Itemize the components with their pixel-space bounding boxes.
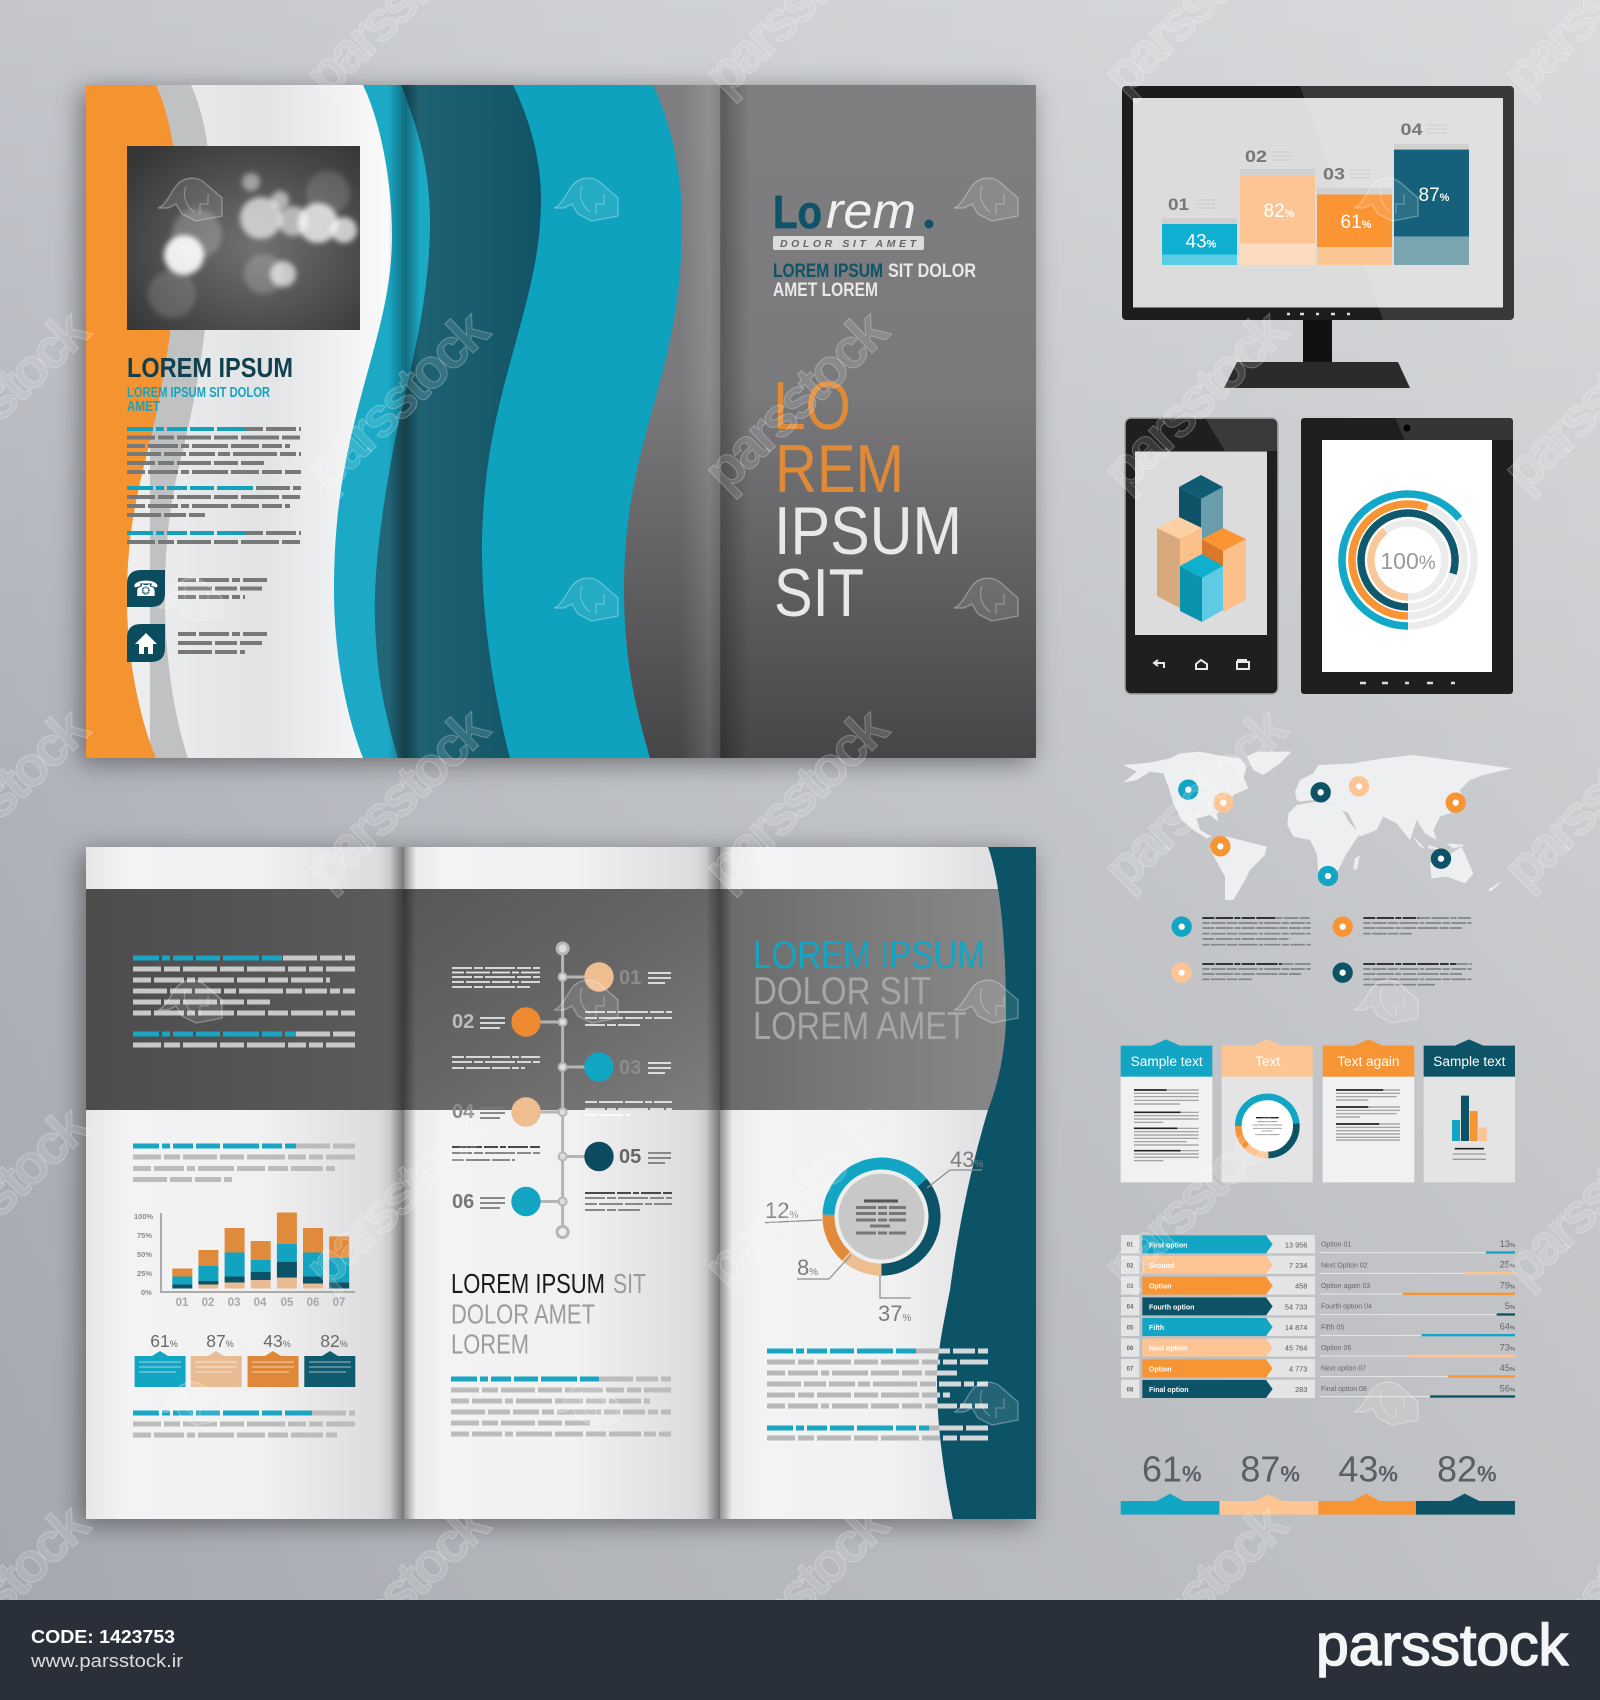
bar chart: 07	[333, 1297, 345, 1309]
option progress lines: 56%	[1500, 1383, 1515, 1393]
watermark: parsstock	[1090, 695, 1300, 901]
bar 02	[1240, 147, 1315, 265]
bar chart: 03	[228, 1297, 240, 1309]
timeline: 04	[452, 1101, 475, 1123]
bar chart: 04	[254, 1297, 267, 1309]
option progress lines: Next option 07	[1321, 1366, 1366, 1373]
text block above chart	[133, 1146, 355, 1180]
grey curved strip	[150, 85, 212, 758]
icon: home	[127, 624, 165, 662]
table indices: 07	[1127, 1367, 1134, 1373]
bar 03	[1317, 164, 1392, 265]
bottom percent stats: 82%	[1437, 1449, 1497, 1490]
bar 01: 01	[1168, 195, 1189, 214]
card: text with donut: Text	[1255, 1054, 1280, 1069]
table arrows	[1142, 1235, 1273, 1398]
card: sample text with bars: Sample text	[1433, 1054, 1506, 1069]
percent boxes: 82%	[320, 1331, 348, 1351]
bar 02: 02	[1245, 147, 1267, 166]
donut chart: 12%	[765, 1198, 798, 1223]
option progress lines: 25%	[1500, 1260, 1515, 1270]
table labels: Fifth	[1149, 1325, 1164, 1332]
cover big title: SIT	[774, 555, 864, 631]
radial chart	[1342, 494, 1474, 626]
table indices: 05	[1127, 1325, 1134, 1331]
table labels: First option	[1149, 1242, 1187, 1249]
cover big title: REM	[775, 431, 904, 507]
cards	[1121, 1039, 1515, 1182]
right column text lines	[767, 1351, 988, 1438]
teal wave	[352, 85, 541, 758]
timeline: 03	[619, 1057, 641, 1079]
table values: 14 874	[1285, 1323, 1307, 1332]
logo: parsstock	[1316, 1613, 1569, 1678]
bar chart	[134, 1212, 355, 1309]
option progress lines: 45%	[1500, 1363, 1515, 1373]
cover big title: LO	[773, 368, 851, 444]
watermark: parsstock	[1090, 1491, 1300, 1697]
icon: phone buttons	[1154, 660, 1249, 669]
table labels: Second	[1149, 1263, 1174, 1270]
option progress lines: Option again 03	[1321, 1283, 1370, 1290]
watermark: parsstock	[292, 695, 502, 901]
table indices: 03	[1127, 1284, 1134, 1290]
table values: 13 956	[1285, 1240, 1307, 1249]
percent boxes	[135, 1331, 355, 1387]
table values: 7 234	[1289, 1261, 1307, 1270]
cover big title	[773, 368, 962, 631]
heading: right column: LOREM AMET	[753, 1005, 967, 1048]
table values: 45 764	[1285, 1344, 1307, 1353]
light blue wave	[334, 85, 430, 758]
table indices: 04	[1127, 1305, 1134, 1311]
table labels: Option	[1149, 1366, 1171, 1373]
cover page	[400, 85, 1036, 758]
watermark: parsstock	[691, 695, 901, 901]
bar 02: 82%	[1264, 201, 1295, 222]
bar chart: 75%	[137, 1231, 152, 1240]
icon: cubes	[1157, 475, 1246, 622]
bar chart: 02	[202, 1297, 214, 1309]
bar 04: 87%	[1419, 185, 1450, 206]
cover subtitle: LOREM IPSUM	[773, 261, 883, 282]
cover subtitle: SIT DOLOR	[888, 261, 976, 282]
middle column text lines	[451, 1379, 671, 1434]
watermark: parsstock	[292, 1491, 502, 1697]
timeline: 06	[452, 1191, 474, 1213]
table values: 4 773	[1289, 1364, 1307, 1373]
bar chart: 05	[281, 1297, 294, 1309]
heading: right column: DOLOR SIT	[753, 970, 931, 1013]
body text lines	[127, 429, 301, 542]
bottom percent stats: 61%	[1142, 1449, 1202, 1490]
table indices	[1127, 1243, 1134, 1393]
cover big title: IPSUM	[774, 493, 962, 569]
option progress lines: 79%	[1500, 1280, 1515, 1290]
logo: DOLOR SIT AMET	[780, 238, 918, 250]
table labels: Next option	[1149, 1346, 1187, 1353]
donut chart: 37%	[878, 1301, 911, 1326]
heading: right column	[753, 934, 985, 1048]
logo: Lo	[773, 186, 822, 238]
timeline: 02	[452, 1011, 474, 1033]
bar 03: 03	[1323, 164, 1345, 184]
watermark: parsstock	[691, 1491, 901, 1697]
table labels: Fourth option	[1149, 1304, 1194, 1311]
footer	[0, 1600, 1600, 1700]
card: sample text with bars	[1424, 1039, 1515, 1182]
option table	[1121, 1235, 1515, 1398]
photo with bokeh	[127, 146, 360, 330]
table indices: 06	[1127, 1346, 1134, 1352]
icon: phone	[127, 570, 165, 607]
percent boxes: 61%	[150, 1331, 178, 1351]
world map with pins	[1123, 752, 1512, 985]
option progress lines: Fifth 05	[1321, 1324, 1344, 1331]
phone with isometric cubes	[1125, 418, 1278, 694]
donut chart	[765, 1147, 983, 1326]
radial chart: 100%	[1380, 548, 1436, 574]
panel: brochure cover spread	[86, 85, 1036, 758]
heading: lorem ipsum sit dolor amet lorem: LOREM IPSUM	[451, 1268, 605, 1299]
card: sample text	[1121, 1039, 1212, 1182]
table labels: Final option	[1149, 1387, 1189, 1394]
map pins	[1182, 780, 1462, 883]
bottom percent stats: 87%	[1240, 1449, 1300, 1490]
table indices: 01	[1127, 1243, 1134, 1249]
heading: lorem ipsum sit dolor amet lorem	[451, 1268, 646, 1360]
bar chart: 100%	[134, 1212, 154, 1221]
watermark: parsstock	[292, 1093, 502, 1299]
fold shading	[390, 847, 732, 1519]
table labels	[1149, 1242, 1194, 1394]
monitor with step chart	[1122, 86, 1514, 388]
bar 04: 04	[1400, 120, 1423, 139]
option progress lines: Fourth option 04	[1321, 1304, 1372, 1311]
subheading: LOREM IPSUM SIT DOLOR	[127, 385, 270, 401]
table values	[1285, 1240, 1307, 1394]
timeline: 01	[619, 967, 641, 989]
bar 01	[1162, 195, 1237, 265]
heading: lorem ipsum sit dolor amet lorem: LOREM	[451, 1328, 529, 1360]
table rows	[1121, 1235, 1315, 1398]
card: text again: Text again	[1337, 1054, 1399, 1069]
bar chart: 0%	[141, 1288, 152, 1297]
cover subtitle: AMET LOREM	[773, 280, 878, 301]
bar chart: 25%	[137, 1269, 152, 1278]
table labels: Option	[1149, 1284, 1171, 1291]
option progress lines: 13%	[1500, 1239, 1515, 1249]
card: sample text: Sample text	[1131, 1054, 1203, 1069]
bar 01: 43%	[1186, 232, 1217, 252]
blue wave	[400, 85, 682, 758]
timeline	[452, 943, 672, 1238]
subheading	[127, 385, 270, 415]
table values: 283	[1295, 1385, 1307, 1394]
contact text lines	[178, 580, 267, 652]
table values: 458	[1295, 1282, 1307, 1291]
donut chart: 8%	[797, 1255, 818, 1280]
teal side shape	[937, 847, 1036, 1519]
table indices: 08	[1127, 1387, 1134, 1393]
option progress lines: Option 06	[1321, 1345, 1351, 1352]
grey band	[86, 889, 1036, 1110]
code: CODE: 1423753	[31, 1627, 175, 1647]
bar chart: 50%	[137, 1250, 152, 1259]
option progress lines: 5%	[1505, 1301, 1515, 1311]
map legend	[1175, 918, 1472, 985]
fold shading	[388, 85, 750, 758]
watermark: parsstock	[1090, 1093, 1300, 1299]
timeline: 05	[619, 1146, 641, 1168]
text block below boxes	[133, 1413, 355, 1435]
option progress lines: 73%	[1500, 1342, 1515, 1352]
heading: right column: LOREM IPSUM	[753, 934, 985, 977]
option progress lines: Option 01	[1321, 1242, 1351, 1249]
option progress lines: Next Option 02	[1321, 1262, 1368, 1269]
table indices: 02	[1127, 1263, 1134, 1269]
watermark: parsstock	[691, 1093, 901, 1299]
icon: phone: ☎	[133, 577, 159, 601]
website: www.parsstock.ir	[30, 1651, 183, 1671]
panel: brochure inside spread	[86, 847, 1036, 1519]
orange curved strip	[86, 85, 178, 758]
table values: 54 733	[1285, 1302, 1307, 1311]
heading: lorem ipsum sit dolor amet lorem: SIT	[613, 1268, 646, 1299]
heading: lorem ipsum sit dolor amet lorem: DOLOR AMET	[451, 1298, 595, 1330]
percent boxes: 43%	[263, 1331, 291, 1351]
percent boxes: 87%	[206, 1331, 234, 1351]
tablet with radial chart	[1301, 418, 1513, 694]
option progress lines: 64%	[1500, 1322, 1515, 1332]
bar chart: 01	[176, 1297, 189, 1309]
bar 04	[1394, 120, 1469, 265]
back page white	[86, 85, 406, 758]
bar chart: 06	[307, 1297, 319, 1309]
option progress lines	[1320, 1239, 1515, 1398]
watermark: parsstock	[691, 297, 901, 503]
card: text with donut	[1222, 1039, 1313, 1182]
cover subtitle	[773, 261, 976, 301]
page columns	[86, 847, 1036, 1519]
logo: rem	[826, 183, 916, 239]
bottom percent stats	[1121, 1449, 1515, 1515]
heading: lorem ipsum: LOREM IPSUM	[127, 352, 293, 383]
watermark: parsstock	[1090, 297, 1300, 503]
watermark: parsstock	[292, 297, 502, 503]
map land	[1123, 752, 1512, 900]
bottom percent stats: 43%	[1338, 1449, 1398, 1490]
subheading: AMET	[127, 399, 160, 415]
text block on dark band	[133, 958, 355, 1045]
bar 03: 61%	[1341, 212, 1372, 233]
logo	[773, 183, 934, 250]
donut chart: 43%	[950, 1147, 983, 1172]
option progress lines: Final option 08	[1321, 1386, 1367, 1393]
card: text again	[1323, 1039, 1414, 1182]
